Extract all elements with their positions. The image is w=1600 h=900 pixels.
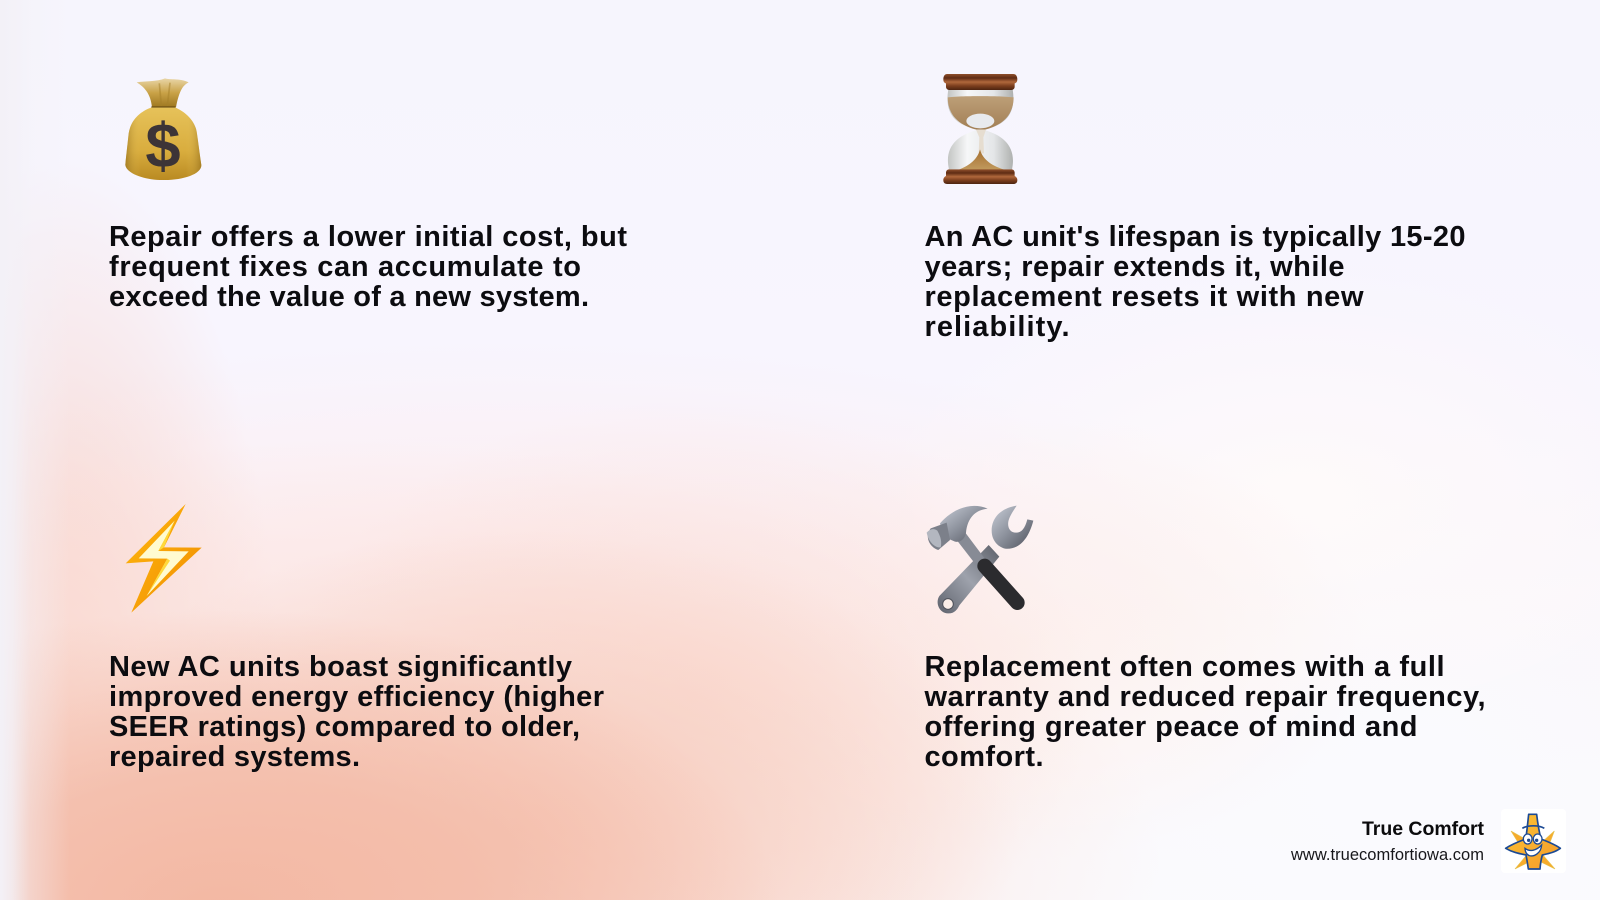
icon: hourglass xyxy=(943,74,1017,184)
text: repair cost: frequent fixes can accumulate to xyxy=(109,251,581,283)
text: repair cost: exceed the value of a new system. xyxy=(109,281,589,313)
text: warranty and comfort: Replacement often comes with a full xyxy=(924,651,1444,683)
text: repair cost: Repair offers a lower initial cost, but xyxy=(109,221,627,253)
brand footer xyxy=(1290,809,1566,873)
text: energy efficiency: improved energy efficiency (higher xyxy=(109,681,604,713)
text: warranty and comfort: offering greater peace of mind and xyxy=(924,711,1418,743)
text: lifespan: An AC unit's lifespan is typically 15-20 xyxy=(924,221,1466,253)
icon: lightning bolt xyxy=(126,504,202,613)
text: warranty and comfort: warranty and reduced repair frequency, xyxy=(924,681,1486,713)
logo: smiling star xyxy=(1501,809,1566,873)
text: warranty and comfort: comfort. xyxy=(924,741,1044,773)
text: lifespan: years; repair extends it, while xyxy=(924,251,1344,283)
panel: lifespan xyxy=(924,74,1466,343)
text: energy efficiency: repaired systems. xyxy=(109,741,360,773)
icon: money bag xyxy=(125,78,201,181)
text: energy efficiency: SEER ratings) compared to older, xyxy=(109,711,580,743)
panel: energy efficiency xyxy=(109,504,604,773)
text: lifespan: reliability. xyxy=(924,311,1070,343)
text: energy efficiency: New AC units boast significantly xyxy=(109,651,572,683)
brand name: True Comfort xyxy=(1362,818,1484,840)
panel: warranty and comfort xyxy=(924,506,1486,773)
icon: money bag: $ xyxy=(145,111,181,181)
text: lifespan: replacement resets it with new xyxy=(924,281,1364,313)
icon: hammer and wrench xyxy=(927,506,1033,613)
website url: www.truecomfortiowa.com xyxy=(1290,846,1484,864)
panel: repair cost xyxy=(109,78,627,313)
